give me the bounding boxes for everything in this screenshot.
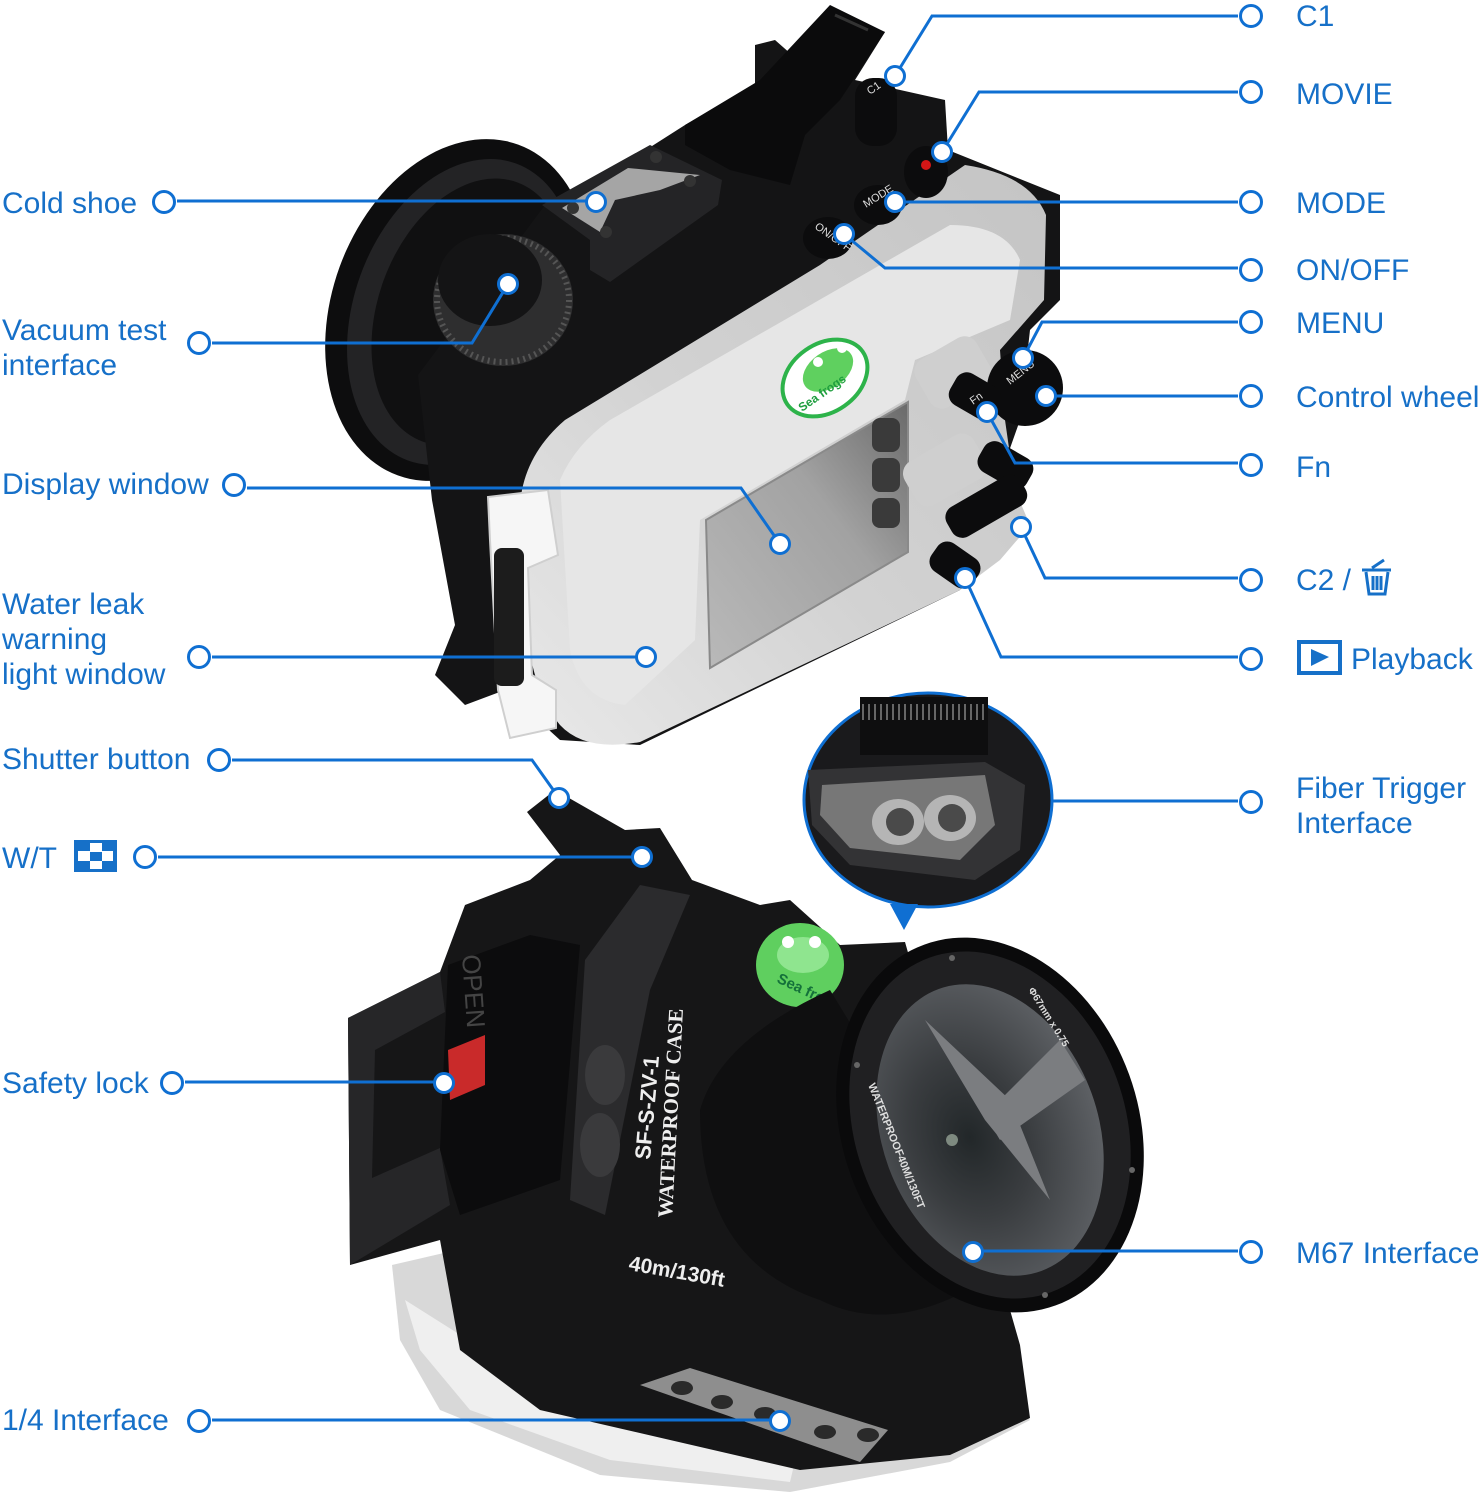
- icon: trash can: [1362, 560, 1391, 594]
- callout: MODE: MODE: [1296, 187, 1386, 220]
- cold shoe plate: [542, 145, 722, 282]
- callout: Cold shoe: [2, 187, 606, 220]
- callout: 1/4 Interface: 1/4 Interface: [2, 1404, 169, 1437]
- side text: [627, 1008, 727, 1292]
- grip: [440, 935, 580, 1215]
- callout: Display window: [2, 468, 790, 554]
- callout: ON/OFF: [834, 224, 1409, 287]
- callout: Water leak warning light window: Water leak: [2, 588, 145, 621]
- callout: Vacuum test interface: [2, 274, 518, 382]
- callout: W/T: [2, 840, 652, 875]
- callout: M67 Interface: [964, 1237, 1479, 1270]
- button labels: C1: [865, 80, 883, 97]
- callout: Fn: Fn: [1296, 451, 1331, 484]
- M67 lens: Φ67mm x 0.75: [1025, 986, 1071, 1049]
- lens hood: [700, 990, 1000, 1315]
- top camera housing: [279, 5, 1063, 745]
- clear button cylinders: [898, 331, 997, 512]
- callout: Fiber Trigger Interface: Interface: [1296, 807, 1413, 840]
- safety lock: [448, 1035, 485, 1100]
- callout: C1: [886, 0, 1334, 86]
- icon: checker zoom: [74, 840, 117, 872]
- button labels: MENU: [1004, 358, 1037, 387]
- top lever: [685, 5, 885, 185]
- callout: Water leak warning light window: warning: [1, 623, 107, 656]
- callout: Shutter button: [2, 743, 568, 808]
- callout: MENU: [1014, 307, 1384, 368]
- callout: Fiber Trigger Interface: Fiber Trigger: [1296, 772, 1466, 805]
- callout: Cold shoe: Cold shoe: [2, 187, 137, 220]
- side text: WATERPROOF CASE: [653, 1008, 688, 1218]
- callout: Fn: [978, 402, 1331, 484]
- callout: Safety lock: Safety lock: [2, 1067, 150, 1100]
- callout: Vacuum test interface: interface: [2, 349, 117, 382]
- callout: Safety lock: [2, 1067, 454, 1100]
- callout: Vacuum test interface: Vacuum test: [2, 314, 167, 347]
- clear lower shell: [392, 1240, 1030, 1492]
- latch: [488, 490, 558, 738]
- callout: C1: C1: [1296, 0, 1334, 33]
- bottom plate: [640, 1368, 888, 1462]
- callout: Water leak warning light window: light window: [2, 658, 166, 691]
- OPEN label: OPEN: [456, 953, 491, 1029]
- callout: Shutter button: Shutter button: [2, 743, 190, 776]
- callout: MOVIE: [932, 78, 1393, 162]
- frog logo sticker: Sea frogs: [796, 371, 849, 414]
- side text: 40m/130ft: [627, 1252, 727, 1292]
- callout: MENU: MENU: [1296, 307, 1384, 340]
- side text: SF-S-ZV-1: [630, 1055, 664, 1160]
- vacuum knob: [433, 234, 573, 366]
- callout: C2 / trash: C2 /: [1296, 564, 1352, 597]
- bottom camera housing: [348, 790, 1195, 1492]
- frog sticker: [756, 923, 844, 1007]
- frog logo sticker: [768, 324, 882, 432]
- callout: Control wheel: Control wheel: [1296, 381, 1479, 414]
- fiber trigger inset: [804, 693, 1052, 930]
- M67 lens: [785, 894, 1195, 1356]
- button labels: ON/OFF: [812, 221, 853, 254]
- callout: W/T: W/T: [2, 842, 57, 875]
- icon: play: [1299, 642, 1340, 673]
- button labels: [812, 80, 1037, 407]
- black body: [418, 15, 1060, 745]
- lens barrel: [279, 102, 637, 518]
- display window: [706, 402, 908, 668]
- M67 lens: WATERPROOF40M/130FT: [865, 1082, 927, 1211]
- clear back panel: [515, 165, 1046, 745]
- black body: [348, 790, 1030, 1470]
- side door: [348, 972, 450, 1265]
- frog sticker: Sea fro: [774, 970, 828, 1007]
- callout: Water leak warning light window: [1, 588, 656, 691]
- callout: Control wheel: [1036, 381, 1479, 414]
- callout: ON/OFF: ON/OFF: [1296, 254, 1409, 287]
- callout: MODE: [886, 187, 1386, 220]
- callout: Fiber Trigger Interface: [1052, 772, 1466, 840]
- callout: M67 Interface: M67 Interface: [1296, 1237, 1479, 1270]
- button labels: MODE: [861, 183, 896, 211]
- buttons: [803, 78, 1063, 593]
- button labels: Fn: [968, 390, 985, 407]
- callout: C2 / trash: [1012, 518, 1391, 597]
- callout: Playback: Playback: [1351, 643, 1474, 676]
- callout: Playback: [956, 568, 1474, 676]
- callout: Display window: Display window: [2, 468, 209, 501]
- callout: MOVIE: MOVIE: [1296, 78, 1393, 111]
- callout: 1/4 Interface: [2, 1404, 790, 1437]
